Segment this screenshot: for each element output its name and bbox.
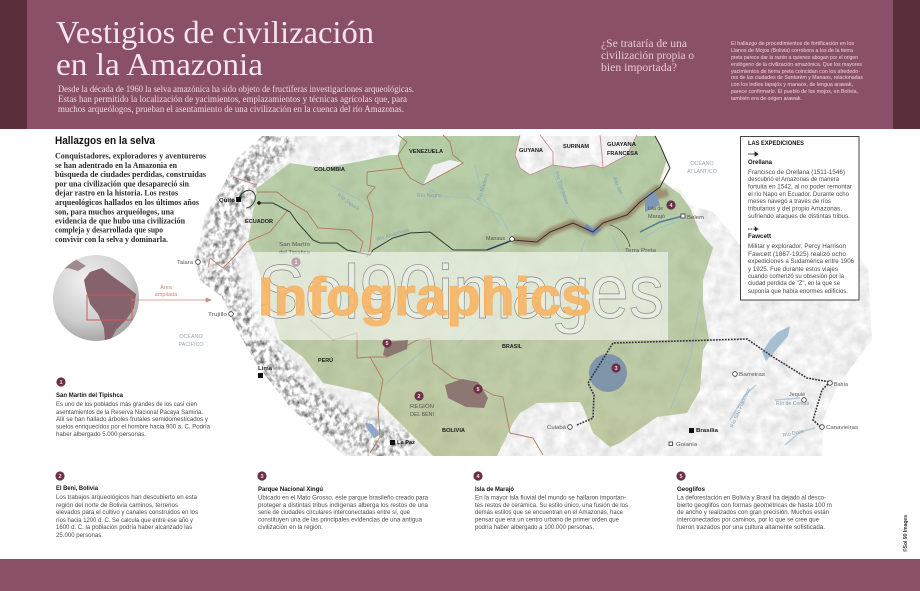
- header side text: con los indios tapajós y manaos, de lengua arawak,: [731, 82, 853, 88]
- place labels: [177, 198, 858, 448]
- body text: arqueológicos hallados en los últimos años: [55, 198, 199, 207]
- place labels: Brasília: [696, 428, 719, 434]
- site markers: 1: [294, 260, 298, 266]
- body text: evidencia de que hubo una civilización: [55, 216, 185, 226]
- note 1: San Martín del Tipishca: haber albergado 5.000 personas.: [56, 431, 146, 438]
- map of the Amazon basin: [177, 135, 880, 456]
- intro text: Estas han permitido la localización de yacimientos, emplazamientos y técnicas agrícolas que, para: [58, 94, 407, 104]
- title: en la Amazonia: [56, 46, 263, 82]
- country labels: BRASIL: [502, 344, 522, 350]
- note 5: Geoglifos: de ancho y realizados con gran precisión. Muchos están: [677, 509, 829, 516]
- note 4: Isla de Marajó: [473, 471, 628, 531]
- legend box: Las expediciones: LAS EXPEDICIONES: [748, 140, 805, 147]
- text: Fawcett: [748, 233, 854, 295]
- place labels: Canavieiras: [826, 425, 858, 431]
- place labels: Barreiras: [739, 372, 765, 378]
- place labels: Marajó: [648, 214, 665, 220]
- header band: [0, 0, 920, 129]
- river labels: Río Madeira: [476, 173, 491, 202]
- note 2: El Beni, Bolivia: [55, 471, 198, 539]
- intro text: muchos arqueólogos, prueban el asentamiento de una civilización en la cuenca del río Amazonas.: [58, 104, 404, 114]
- note 4: Isla de Marajó: pensar que era un centro urbano de primer orden que: [475, 516, 619, 524]
- river labels: Río Japurá: [336, 193, 360, 212]
- note 2: El Beni, Bolivia: 1600 d. C. la población podría haber alcanzado las: [56, 524, 192, 531]
- note 3: Parque Nacional Xingú: Parque Nacional Xingú: [258, 486, 323, 493]
- arrow: Orellana key: [748, 152, 758, 156]
- credit: ©Sol 90 Images: [902, 515, 909, 552]
- site markers: 3: [614, 366, 618, 372]
- place labels: Terra Preta: [625, 248, 657, 254]
- site markers: [291, 200, 676, 401]
- note 3: Parque Nacional Xingú: proteger a distintas tribus indígenas alberga los restos de una: [258, 502, 428, 509]
- note 2: El Beni, Bolivia: El Beni, Bolivia: [56, 485, 98, 492]
- watermark: Sol90images: [258, 250, 664, 335]
- header side text: Llanos de Mojos (Bolivia) corrobora a los de la tierra: [731, 48, 853, 54]
- river labels: Río Jari: [611, 177, 623, 195]
- country labels: GUAYANA: [607, 142, 637, 148]
- arrow: Orellana route: [238, 136, 670, 255]
- text: Orellana: meses navegó a través de ríos: [748, 198, 831, 205]
- note 3: Parque Nacional Xingú: serie de ciudades circulares interconectadas entre sí, que: [258, 509, 410, 516]
- text: Orellana: tributarios y del propio Amazonas,: [748, 206, 842, 212]
- country labels: COLOMBIA: [314, 167, 346, 173]
- header side text: El hallazgo de procedimientos de fortificación en los: [731, 41, 854, 47]
- title: Vestigios de civilización: [56, 14, 374, 50]
- label: expanded area: Área: [160, 284, 173, 291]
- river labels: Río Trombetas: [553, 171, 569, 205]
- text: Orellana: Orellana: [748, 159, 772, 166]
- note 1: San Martín del Tipishca: suelos enriquecidos por el hombre hacia 900 a. C. Podría: [56, 424, 210, 430]
- note 3: Parque Nacional Xingú: Ubicado en el Mato Grosso, este parque brasileño creado para: [258, 494, 428, 502]
- national borders: [208, 135, 637, 455]
- intro text: Desde la década de 1960 la selva amazónica ha sido objeto de fructíferas investigaciones arqueológicas.: [58, 84, 414, 94]
- ocean label: Atlantic: OCÉANO: [690, 160, 714, 167]
- country labels: GUYANA: [519, 148, 544, 154]
- note 4: Isla de Marajó: En la mayor isla fluvial del mundo se hallaron importan-: [475, 494, 626, 502]
- panel: Hallazgos en la selva: [55, 135, 206, 244]
- label: expanded area: [155, 284, 178, 298]
- expanded area box: [87, 295, 132, 320]
- body text: compleja y desarrollada que supo: [55, 226, 163, 234]
- text: Orellana: sufriendo ataques de distintas tribus.: [748, 213, 850, 220]
- geoglyph area: Peru-Brazil: [383, 340, 408, 357]
- arrow: Fawcett key: [748, 227, 758, 231]
- question heading: bien importada?: [601, 60, 677, 74]
- place labels: Quito: [219, 198, 235, 204]
- site markers: 4: [669, 203, 673, 209]
- place labels: Belem: [687, 215, 704, 221]
- header side text: yacimientos de tierra preta coincidan con los alrededo-: [731, 69, 860, 75]
- place labels: del Tipishca: [279, 250, 311, 256]
- arrow: expanded area: [132, 298, 211, 302]
- place labels: Isla de: [648, 206, 663, 212]
- text: Orellana: descubrió el Amazonas de manera: [748, 176, 839, 183]
- site markers: 2: [417, 394, 421, 400]
- watermark: Infographics: [258, 267, 592, 327]
- note 5: Geoglifos: La deforestación en Bolivia y Brasil ha dejado al desco-: [677, 494, 826, 502]
- note 5: Geoglifos: 5: [679, 474, 683, 480]
- note 5: Geoglifos: [676, 471, 832, 531]
- note 4: Isla de Marajó: Isla de Marajó: [475, 486, 514, 493]
- place labels: REGIÓN: [410, 403, 434, 410]
- text: Fawcett: suponía que había enormes edificios.: [748, 288, 848, 295]
- note 3: Parque Nacional Xingú: civilización en la región.: [258, 524, 323, 531]
- country labels: [245, 142, 639, 434]
- body text: Conquistadores, exploradores y aventureros: [55, 152, 206, 160]
- note 5: Geoglifos: interconectados por caminos, por lo que se cree que: [677, 516, 819, 524]
- note 5: Geoglifos: bierto geoglifos con formas geométricas de hasta 100 m: [677, 502, 832, 509]
- legend box: Las expediciones: [740, 136, 859, 300]
- text: Orellana: fortuita en 1542, al no poder remontar: [748, 184, 853, 190]
- note 4: Isla de Marajó: tes restos de cerámica. Su estilo único, una fusión de los: [475, 502, 628, 509]
- body text: [55, 152, 206, 244]
- text: Orellana: [748, 159, 853, 220]
- heading: Hallazgos en la selva: [55, 135, 156, 147]
- country labels: VENEZUELA: [409, 149, 444, 155]
- river labels: Río São Francisco: [729, 387, 752, 429]
- footer band: [0, 559, 920, 591]
- note 2: El Beni, Bolivia: región del norte de Bolivia caminos, terrenos: [56, 502, 178, 509]
- place labels: San Martín: [279, 242, 310, 248]
- North America on globe: [64, 260, 86, 271]
- question heading: [601, 36, 694, 74]
- note 1: San Martín del Tipishca: 1: [59, 380, 63, 386]
- note 1: San Martín del Tipishca: Allí se han hallado árboles frutales semidomesticados y: [56, 416, 209, 423]
- place labels: La Paz: [397, 440, 415, 446]
- body text: por una civilización que desapareció sin: [55, 180, 189, 188]
- ocean label: Pacific: OCÉANO: [179, 333, 203, 340]
- text: Fawcett: Fawcett: [748, 233, 772, 240]
- globe locator: [53, 255, 139, 341]
- country labels: PERÚ: [318, 357, 333, 364]
- text: Orellana: el río Napo en Ecuador. Durante ocho: [748, 191, 849, 198]
- South America on globe: [84, 268, 136, 341]
- river labels: Río Negro: [417, 193, 441, 199]
- body text: búsqueda de ciudades perdidas, construidas: [55, 170, 206, 179]
- question heading: civilización propia o: [601, 48, 694, 62]
- place labels: Goiania: [676, 442, 698, 448]
- question heading: ¿Se trataría de una: [601, 36, 688, 50]
- ocean label: Atlantic: ATLÁNTICO: [687, 168, 717, 175]
- place labels: Jequié: [789, 392, 805, 398]
- country labels: ECUADOR: [245, 219, 274, 225]
- note 4: Isla de Marajó: 4: [476, 474, 480, 480]
- header side text: endógeno de la civilización amazónica. Que los mayores: [731, 62, 862, 68]
- header side text: también era de origen arawak.: [731, 96, 802, 102]
- label: expanded area: ampliada: [155, 292, 178, 298]
- river labels: [336, 171, 810, 439]
- body text: son, para muchos arqueólogos, una: [55, 208, 174, 216]
- place labels: Bahía: [834, 382, 849, 388]
- note 1: San Martín del Tipishca: San Martín del Tipishca: [56, 392, 123, 399]
- country labels: FRANCESA: [607, 151, 639, 157]
- geoglyph area: Bolivia: [445, 379, 488, 408]
- text: Fawcett: Fawcett (1867-1925) realizó ocho: [748, 251, 846, 258]
- body text: se han adentrado en la Amazonia en: [55, 161, 177, 170]
- note 2: El Beni, Bolivia: 25.000 personas.: [56, 532, 103, 539]
- river labels: Río Doce: [782, 429, 805, 439]
- header side text: parece confirmarlo. El pueblo de los mojos, en Bolivia,: [731, 89, 858, 95]
- header side text: [731, 41, 863, 102]
- place labels: Cuiabá: [547, 425, 567, 431]
- river labels: Río de Contas: [776, 401, 810, 407]
- ocean label: Atlantic: [687, 160, 717, 175]
- river labels: Río Amazonas: [376, 227, 410, 243]
- note 3: Parque Nacional Xingú: 3: [260, 474, 264, 480]
- river network: [330, 165, 815, 445]
- place labels: DEL BENI: [410, 412, 434, 418]
- Terra Preta leader line: [610, 225, 630, 247]
- note 4: Isla de Marajó: podría haber albergado a 100.000 personas.: [475, 524, 594, 531]
- Amazon river with archaeological corridor: [487, 187, 683, 250]
- site markers: 5: [476, 387, 480, 393]
- place labels: Manaus: [486, 236, 505, 242]
- text: Fawcett: cuando comenzó su obsesión por la: [748, 273, 844, 280]
- text: Fawcett: y 1925. Fue durante estos viajes: [748, 266, 838, 273]
- site markers: 5: [385, 341, 389, 347]
- city markers: [196, 197, 832, 446]
- note 2: El Beni, Bolivia: 2: [58, 474, 62, 480]
- text: Orellana: Francisco de Orellana (1511-1546): [748, 169, 845, 176]
- note 3: Parque Nacional Xingú: [257, 471, 428, 531]
- body text: convivir con la selva y dominarla.: [55, 235, 168, 244]
- note 2: El Beni, Bolivia: Los trabajos arqueológicos han descubierto en esta: [56, 494, 197, 501]
- note 1: San Martín del Tipishca: Es uno de los poblados más grandes de los casi cien: [56, 401, 197, 408]
- note 5: Geoglifos: Geoglifos: [677, 486, 705, 493]
- ocean label: Pacific: PACÍFICO: [178, 341, 204, 348]
- place labels: Lima: [258, 366, 273, 372]
- arrow: Fawcett route: [577, 339, 830, 428]
- note 1: San Martín del Tipishca: asentamientos de la Reserva Nacional Pacaya Samiria.: [56, 409, 203, 416]
- Xingu National Park area: [589, 354, 627, 392]
- note 1: San Martín del Tipishca: [56, 377, 210, 438]
- text: Fawcett: expediciones a Sudamérica entre 1906: [748, 258, 854, 265]
- header side text: preta parece dar la razón a quienes abogan por el origen: [731, 55, 858, 61]
- country labels: BOLIVIA: [442, 428, 466, 434]
- note 2: El Beni, Bolivia: ríos hacia 1200 d. C. Se calcula que entre ese año y: [56, 517, 194, 524]
- text: Fawcett: Militar y explorador, Percy Harrison: [748, 243, 846, 250]
- intro text: [58, 84, 414, 114]
- place labels: Talara: [177, 260, 194, 266]
- note 3: Parque Nacional Xingú: constituyen una de las principales evidencias de una antigua: [258, 516, 422, 524]
- title: [56, 14, 374, 82]
- place labels: Trujillo: [208, 312, 227, 318]
- note 4: Isla de Marajó: demás estilos que se encuentran en el Amazonas, hace: [475, 509, 623, 516]
- body text: dejar rastro en la historia. Los restos: [55, 188, 178, 198]
- text: Fawcett: ciudad perdida de "Z", en la que se: [748, 280, 840, 287]
- note 5: Geoglifos: fueron trazados por una cultura altamente sofisticada.: [677, 524, 825, 531]
- country labels: SURINAM: [563, 144, 589, 150]
- header side text: res de las ciudades de Santarém y Manaos, relacionadas: [731, 75, 863, 81]
- ocean label: Pacific: [178, 333, 204, 348]
- note 2: El Beni, Bolivia: elevados para el cultivo y canales construidos en los: [56, 509, 198, 516]
